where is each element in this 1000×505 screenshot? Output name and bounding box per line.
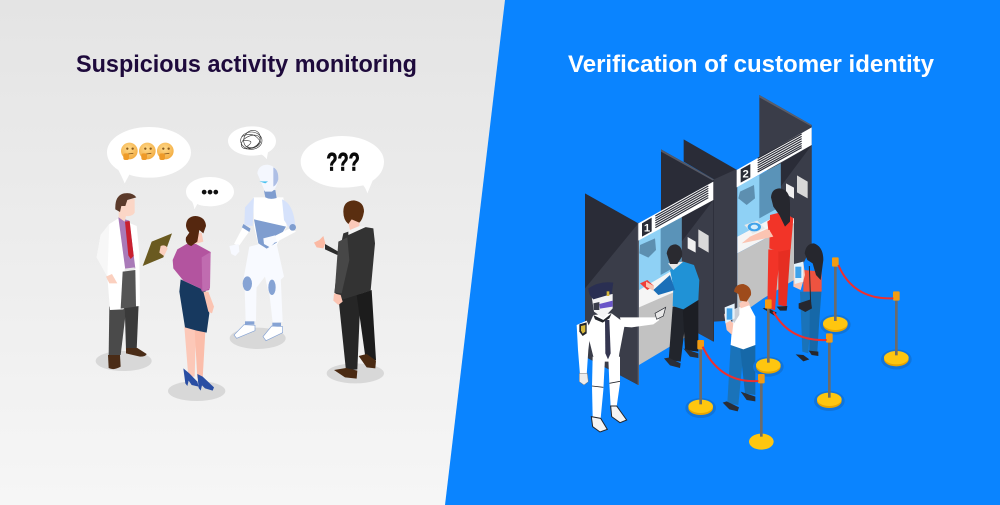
figure: man in dark suit <box>314 200 376 379</box>
speech bubble: question marks: ??? <box>326 148 360 176</box>
figure: woman in red <box>742 188 793 316</box>
ground shadows <box>96 328 384 401</box>
speech bubble: question marks <box>301 136 384 193</box>
rope: back <box>838 265 893 298</box>
figure: humanoid robot <box>229 165 296 341</box>
stanchion: middle right <box>814 333 845 411</box>
booth 1: 1 <box>644 222 650 234</box>
speech bubble: ellipsis <box>186 177 234 209</box>
panel: verification scene <box>577 95 912 450</box>
stanchion: back right <box>881 291 912 369</box>
speech bubble: thinking emojis <box>107 127 191 183</box>
panel: left background <box>0 0 505 505</box>
title: suspicious activity monitoring: Suspicious activity monitoring <box>76 51 417 78</box>
figure: police robot <box>577 282 666 432</box>
booth 2: 2 <box>743 168 749 180</box>
speech bubble: ellipsis: ••• <box>201 182 219 201</box>
booth 1 back wall <box>661 149 714 342</box>
title: verification of customer identity: Verification of customer identity <box>568 51 935 78</box>
figure: woman in purple <box>173 216 214 391</box>
figure: woman with handbag <box>793 243 823 361</box>
figure: man in white t-shirt <box>723 284 755 411</box>
booth 1 <box>585 182 713 385</box>
stanchion: front right <box>749 374 774 450</box>
stanchion: middle left <box>753 299 784 377</box>
stanchion: back left <box>820 257 851 335</box>
rope: front <box>703 347 758 381</box>
stanchion: front left <box>685 340 716 418</box>
panel: monitoring scene <box>96 126 384 401</box>
booth 2 <box>684 95 812 323</box>
speech bubble: tangled thought <box>228 126 276 159</box>
figure: man in blue sweater <box>646 244 699 368</box>
rope: middle <box>773 312 827 340</box>
figure: doctor with clipboard <box>97 193 172 369</box>
